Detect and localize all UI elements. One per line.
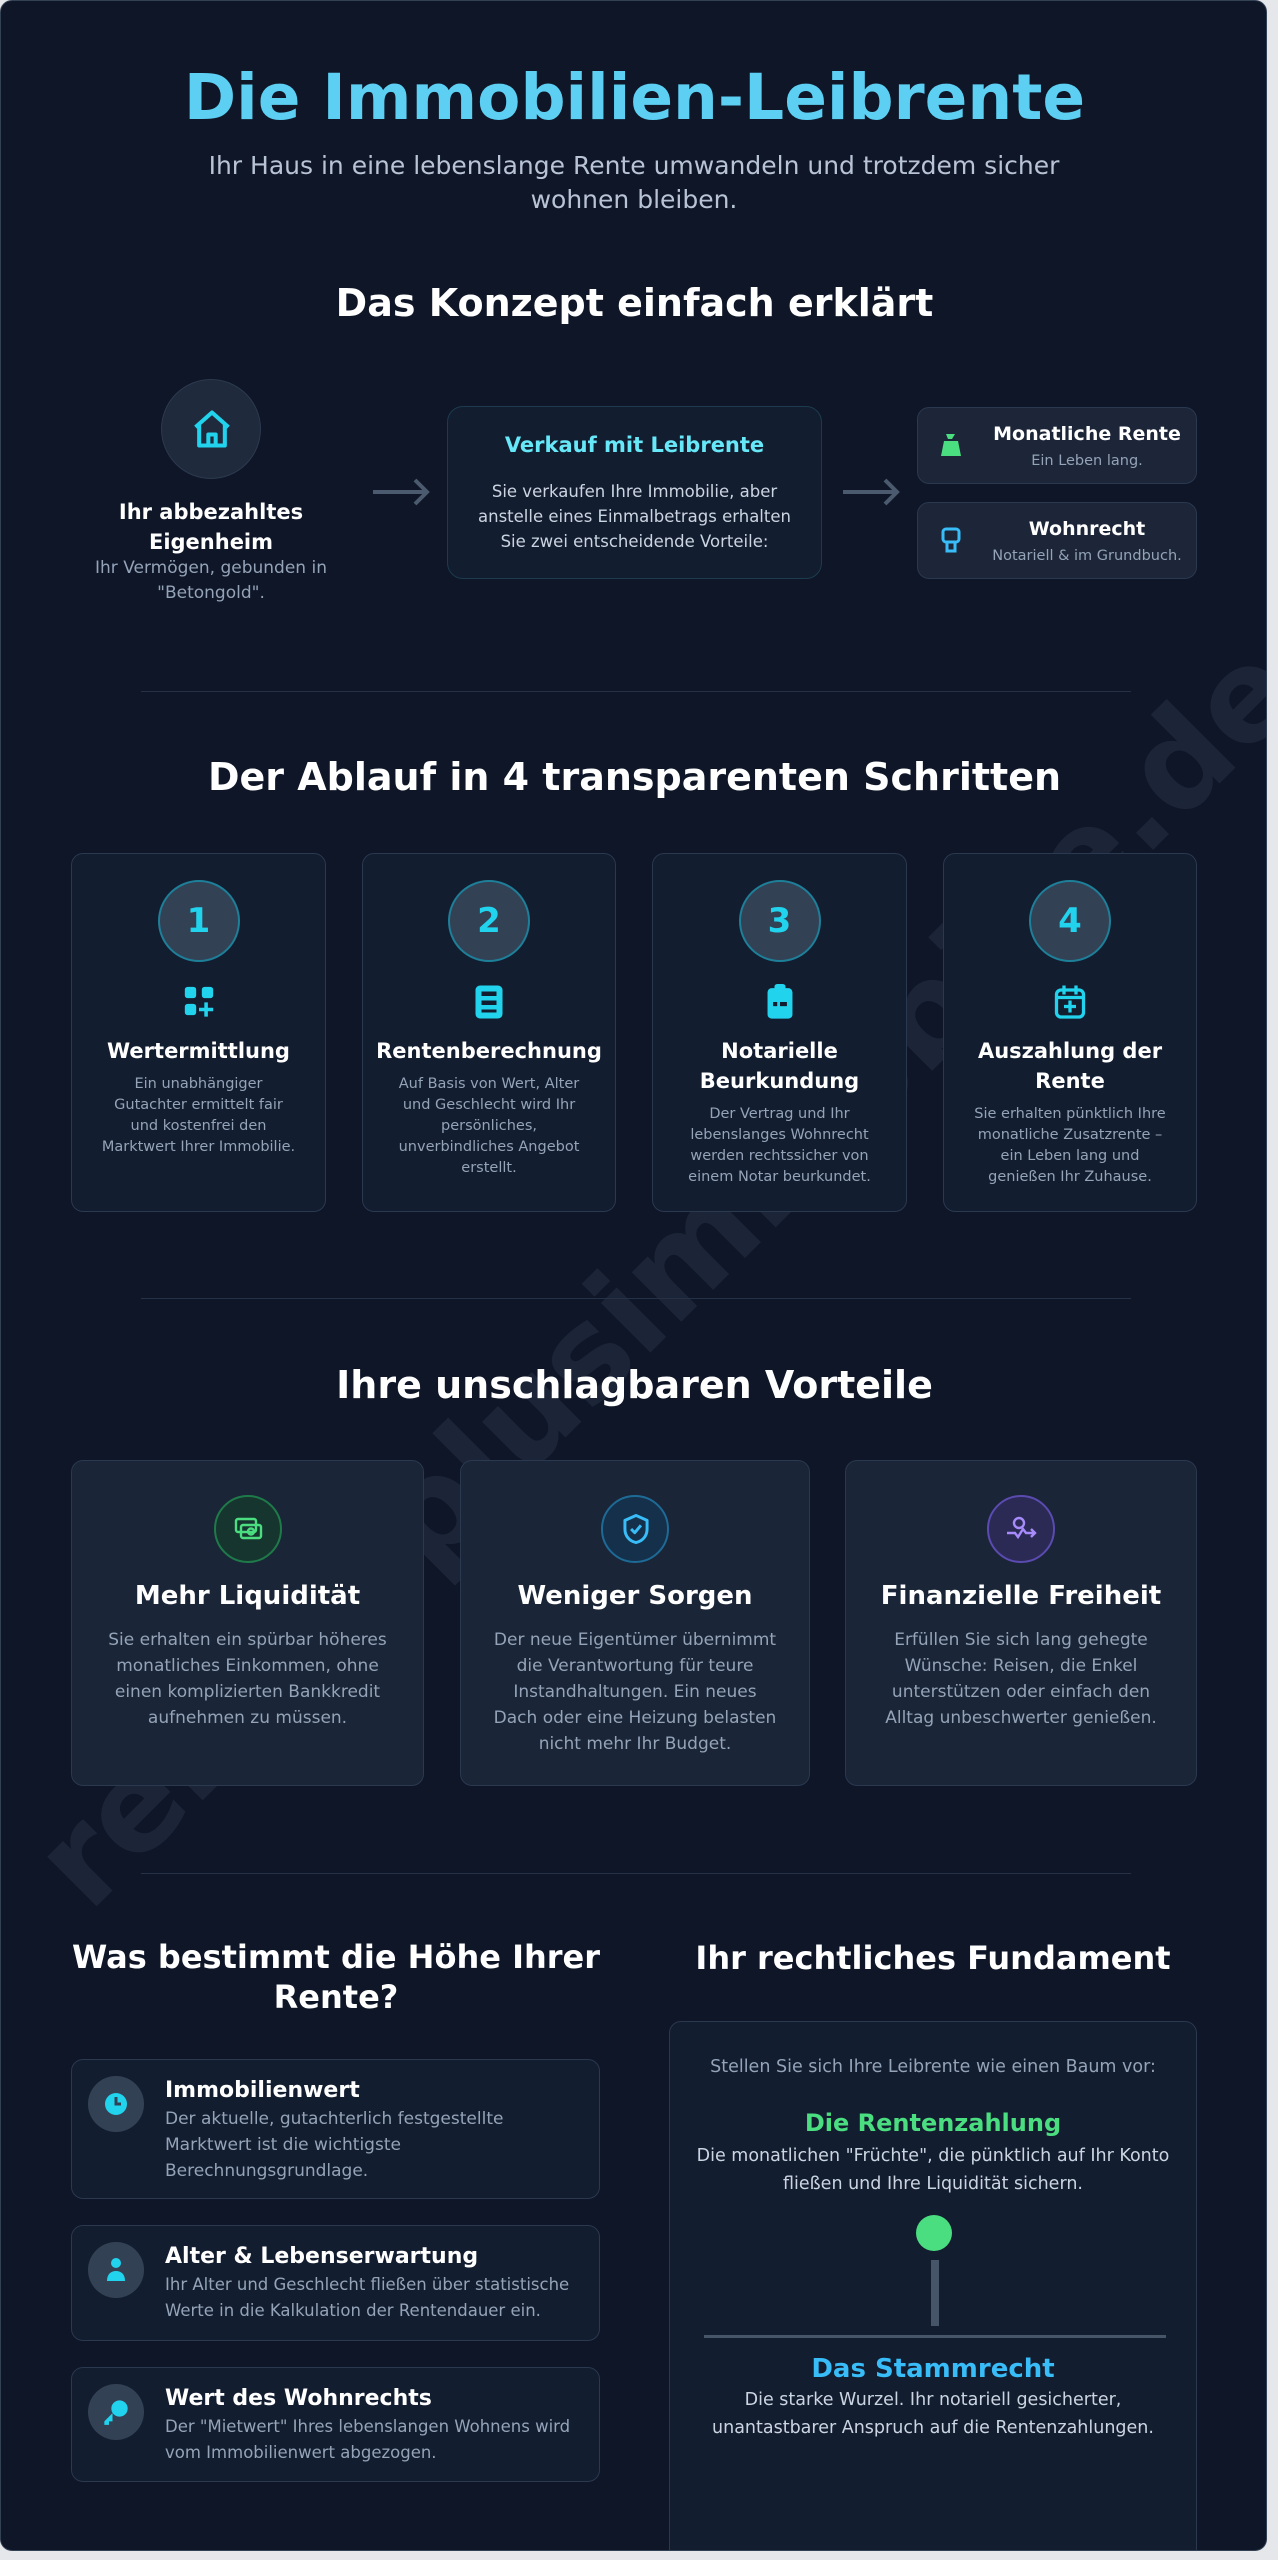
factor: wohnrecht: vom Immobilienwert abgezogen. bbox=[165, 2443, 437, 2462]
heading: vorteile: Ihre unschlagbaren Vorteile bbox=[336, 1363, 933, 1407]
panel: baum: Die monatlichen "Früchte", die pünktlich auf Ihr Konto fließen und Ihre Liquidität sichern. bbox=[697, 2146, 1169, 2194]
box: wohnrecht: Wohnrecht bbox=[1029, 518, 1145, 540]
benefit: freiheit bbox=[845, 1460, 1197, 1786]
factor: alter: Werte in die Kalkulation der Rentendauer ein. bbox=[165, 2301, 541, 2320]
step 1 bbox=[71, 853, 326, 1212]
step 1: Gutachter ermittelt fair bbox=[114, 1097, 283, 1113]
text: eigenheim: Ihr abbezahltes Eigenheim bbox=[119, 500, 303, 554]
box: verkauf: Verkauf mit Leibrente bbox=[505, 433, 764, 457]
step 1: Marktwert Ihrer Immobilie. bbox=[102, 1139, 295, 1155]
icon: grid bbox=[184, 986, 214, 1017]
step 2 bbox=[362, 853, 616, 1212]
step 3: Der Vertrag und Ihr lebenslanges Wohnrecht werden rechtssicher von einem Notar beurkundet. bbox=[688, 1106, 871, 1185]
subtitle: Ihr Haus in eine lebenslange Rente umwandeln und trotzdem sicher wohnen bleiben. bbox=[209, 151, 1059, 214]
step 1: und kostenfrei den bbox=[131, 1118, 266, 1134]
factor: alter bbox=[71, 2225, 600, 2341]
factor: immobilienwert: Der aktuelle, gutachterlich festgestellte bbox=[165, 2109, 503, 2129]
heading: concept: Das Konzept einfach erklärt bbox=[336, 281, 933, 325]
heading: faktoren: Was bestimmt die Höhe Ihrer Rente? bbox=[72, 1938, 600, 2016]
benefit: liquiditaet bbox=[71, 1460, 424, 1786]
step 2: Rentenberechnung bbox=[376, 1039, 602, 1063]
step 3: Notarielle Beurkundung bbox=[700, 1039, 859, 1093]
panel: baum bbox=[669, 2021, 1197, 2560]
step 2: 2 bbox=[477, 901, 501, 941]
concept: home bbox=[95, 379, 327, 603]
factor: wohnrecht bbox=[71, 2367, 600, 2482]
step 4: Auszahlung der Rente bbox=[978, 1039, 1162, 1093]
icon: tree bbox=[916, 2215, 952, 2326]
icon: calculator bbox=[476, 986, 502, 1018]
benefit: sorgen bbox=[460, 1460, 810, 1786]
box: verkauf: Sie verkaufen Ihre Immobilie, aber anstelle eines Einmalbetrags erhalten Sie zwei entscheidende Vorteile: bbox=[478, 482, 791, 551]
benefit: liquiditaet: Sie erhalten ein spürbar höheres monatliches Einkommen, ohne einen komplizierten Bankkredit aufnehmen zu müssen. bbox=[108, 1630, 387, 1728]
benefit: freiheit: Finanzielle Freiheit bbox=[881, 1581, 1161, 1611]
factor: wohnrecht: Der "Mietwert" Ihres lebenslangen Wohnens wird bbox=[165, 2417, 570, 2436]
title: Die Immobilien-Leibrente bbox=[184, 61, 1085, 134]
icon: calendar bbox=[1054, 986, 1086, 1019]
benefit: sorgen: Weniger Sorgen bbox=[517, 1581, 753, 1611]
benefit: sorgen: Der neue Eigentümer übernimmt die Verantwortung für teure Instandhaltungen. Ein neues Dach oder eine Heizung belasten nicht mehr Ihr Budget. bbox=[494, 1630, 776, 1754]
panel: baum: Die starke Wurzel. Ihr notariell gesicherter, unantastbarer Anspruch auf die Rentenzahlungen. bbox=[712, 2390, 1154, 2438]
box: monatliche rente bbox=[917, 407, 1197, 484]
text: stammrecht: Das Stammrecht bbox=[811, 2354, 1055, 2384]
concept: home: Ihr Vermögen, gebunden in "Betongold". bbox=[95, 558, 327, 603]
factor: alter: Alter & Lebenserwartung bbox=[165, 2244, 478, 2269]
step 1: Wertermittlung bbox=[107, 1039, 290, 1063]
arrow 1 bbox=[373, 478, 430, 506]
icon: house bbox=[161, 379, 261, 479]
factor: alter: Ihr Alter und Geschlecht fließen über statistische bbox=[165, 2275, 569, 2294]
step 4: Sie erhalten pünktlich Ihre monatliche Zusatzrente – ein Leben lang und genießen Ihr Zuhause. bbox=[974, 1106, 1166, 1185]
box: monatliche rente: Monatliche Rente bbox=[993, 423, 1181, 445]
benefit: freiheit: Erfüllen Sie sich lang gehegte Wünsche: Reisen, die Enkel unterstützen oder einfach den Alltag unbeschwerter genießen. bbox=[885, 1630, 1157, 1728]
box: monatliche rente: Ein Leben lang. bbox=[1031, 453, 1143, 469]
benefit: liquiditaet: Mehr Liquidität bbox=[135, 1581, 360, 1611]
box: verkauf bbox=[447, 406, 822, 579]
step 3 bbox=[652, 853, 907, 1212]
step 4: 4 bbox=[1058, 901, 1082, 941]
factor: immobilienwert: Berechnungsgrundlage. bbox=[165, 2161, 368, 2181]
box: wohnrecht: Notariell & im Grundbuch. bbox=[992, 548, 1182, 564]
step 3: 3 bbox=[768, 901, 791, 941]
factor: immobilienwert: Marktwert ist die wichtigste bbox=[165, 2135, 401, 2155]
box: wohnrecht bbox=[917, 502, 1197, 579]
step 1: Ein unabhängiger bbox=[134, 1076, 263, 1092]
icon: clipboard bbox=[768, 984, 792, 1019]
heading: fundament: Ihr rechtliches Fundament bbox=[695, 1939, 1171, 1977]
step 1: 1 bbox=[187, 901, 210, 941]
factor: immobilienwert: Immobilienwert bbox=[165, 2078, 360, 2103]
arrow 2 bbox=[843, 478, 900, 506]
heading: ablauf: Der Ablauf in 4 transparenten Schritten bbox=[208, 755, 1061, 799]
step 4 bbox=[943, 853, 1197, 1212]
panel: baum: Stellen Sie sich Ihre Leibrente wie einen Baum vor: bbox=[710, 2057, 1156, 2077]
text: rentenzahlung: Die Rentenzahlung bbox=[805, 2109, 1061, 2137]
factor: wohnrecht: Wert des Wohnrechts bbox=[165, 2386, 432, 2411]
step 2: Auf Basis von Wert, Alter und Geschlecht wird Ihr persönliches, unverbindliches Angebot erstellt. bbox=[399, 1076, 579, 1176]
factor: immobilienwert bbox=[71, 2059, 600, 2199]
